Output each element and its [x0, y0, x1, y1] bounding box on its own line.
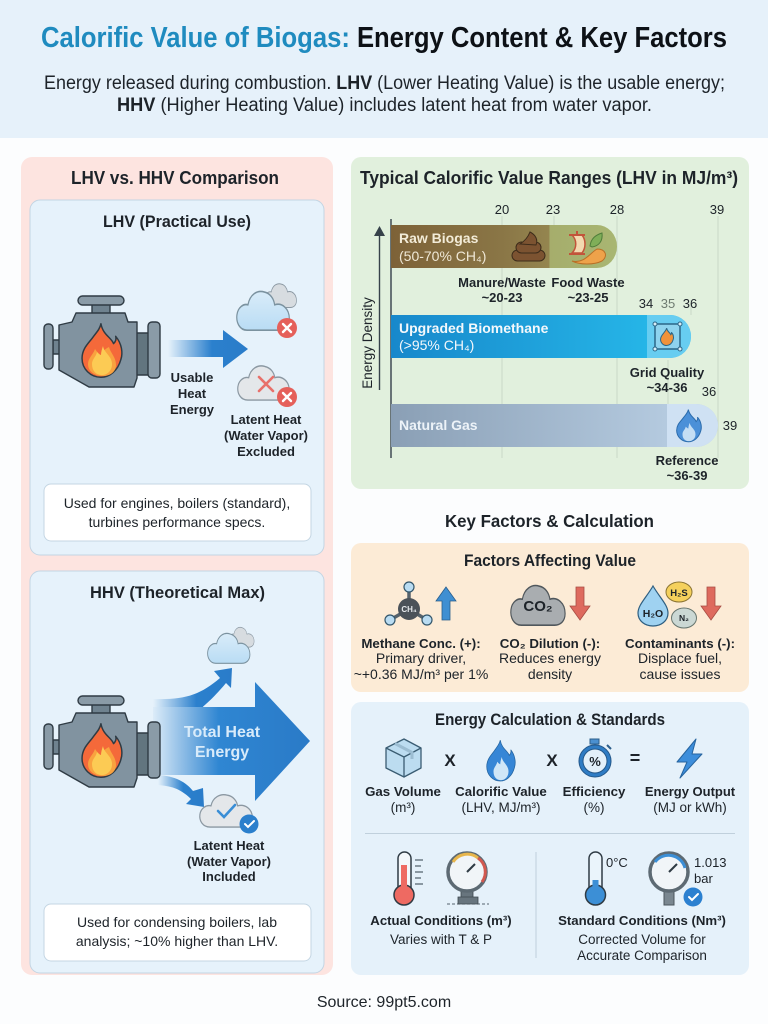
- label: latent heat excluded: Latent Heat: [231, 412, 302, 427]
- scale values: [495, 202, 737, 433]
- heading: calculation: Energy Calculation & Standards: [435, 711, 665, 729]
- bar: raw biogas: (50-70% CH₄): [399, 248, 486, 264]
- icon: top cloud: [208, 627, 254, 663]
- text: methane: Methane Conc. (+):: [361, 636, 481, 651]
- panel: factors affecting value: [351, 543, 749, 692]
- label: usable heat energy: Heat: [178, 386, 207, 401]
- label: latent heat included: Latent Heat: [194, 838, 265, 853]
- chart: range bars: [360, 202, 737, 483]
- formula labels: (MJ or kWh): [653, 800, 727, 815]
- text: contaminants: cause issues: [640, 666, 720, 682]
- icon: gas volume box: [386, 739, 421, 777]
- scale values: 34: [639, 296, 653, 311]
- formula labels: Gas Volume: [365, 784, 441, 799]
- label: standard pressure: bar: [694, 871, 713, 886]
- heading: ranges: Typical Calorific Value Ranges (LHV in MJ/m³): [360, 168, 738, 188]
- icon: efficiency timer: [579, 739, 611, 777]
- note: HHV use: [44, 904, 311, 961]
- bar: raw biogas: [391, 225, 617, 268]
- scale values: 39: [723, 418, 737, 433]
- icon: efficiency timer: %: [589, 754, 601, 769]
- operator: =: [630, 748, 640, 768]
- icon: CO2 cloud with down arrow: [511, 586, 590, 625]
- range labels: Food Waste: [551, 275, 625, 290]
- formula labels: Energy Output: [645, 784, 736, 799]
- icon: actual thermometer: [394, 852, 423, 905]
- text: standard conditions: Standard Conditions (Nm³): [558, 913, 726, 928]
- heading: HHV: HHV (Theoretical Max): [90, 583, 265, 602]
- text: standard conditions: Corrected Volume for: [578, 932, 706, 947]
- icon: contaminants with down arrow: H₂O: [643, 608, 663, 620]
- label: latent heat included: Included: [202, 869, 256, 884]
- icon: food waste: [569, 231, 605, 264]
- text: methane: Primary driver,: [376, 650, 466, 666]
- text: actual conditions: Varies with T & P: [390, 932, 492, 947]
- icon: standard gauge with check: [650, 853, 702, 906]
- icon: contaminants with down arrow: [638, 582, 721, 628]
- bar: upgraded biomethane: Upgraded Biomethane: [399, 320, 549, 336]
- arrow: total heat: [153, 682, 310, 801]
- heading: key factors: Key Factors & Calculation: [445, 511, 654, 531]
- bar: natural gas: Natural Gas: [399, 417, 478, 433]
- heading: factors: Factors Affecting Value: [464, 552, 636, 570]
- icon: CO2 cloud with down arrow: CO₂: [523, 598, 553, 615]
- icon: grid pipe flame: [653, 322, 682, 351]
- operator: X: [444, 751, 456, 770]
- bar: upgraded biomethane: [391, 315, 691, 358]
- label: usable heat energy: Energy: [170, 402, 215, 417]
- text: CO2: Reduces energy: [499, 650, 601, 666]
- axis label: energy density: Energy Density: [360, 297, 375, 389]
- label: standard pressure: 1.013: [694, 855, 727, 870]
- operator: X: [546, 751, 558, 770]
- formula labels: (m³): [391, 800, 415, 815]
- icon: gas flame: [677, 410, 701, 442]
- text: standard conditions: Accurate Comparison: [577, 948, 707, 963]
- label: total heat energy: Total Heat: [184, 724, 261, 741]
- bar: raw biogas: Raw Biogas: [399, 230, 479, 246]
- text: contaminants: Contaminants (-):: [625, 636, 735, 651]
- range labels: ~20-23: [482, 290, 522, 305]
- range labels: ~36-39: [667, 468, 707, 483]
- scale values: 20: [495, 202, 509, 217]
- range labels: ~23-25: [568, 290, 608, 305]
- subtitle: HHV (Higher Heating Value) includes latent heat from water vapor.: [117, 95, 652, 116]
- panel: LHV vs HHV comparison: [21, 157, 333, 975]
- label: latent heat excluded: (Water Vapor): [224, 428, 308, 443]
- text: methane: ~+0.36 MJ/m³ per 1%: [354, 666, 488, 682]
- card: HHV theoretical max: [30, 571, 324, 973]
- panel: typical calorific value ranges: [351, 157, 749, 489]
- title: Calorific Value of Biogas: Energy Content & Key Factors: [41, 22, 727, 54]
- icon: calorific flame: [487, 740, 515, 781]
- label: latent heat included: (Water Vapor): [187, 854, 271, 869]
- arrow: vapor branch up: [153, 668, 232, 707]
- arrow: energy axis: [374, 226, 385, 390]
- bar: upgraded biomethane: (>95% CH₄): [399, 337, 474, 353]
- source: Source: 99pt5.com: [317, 994, 451, 1011]
- arrow: usable heat: [168, 330, 248, 368]
- formula labels: Calorific Value: [455, 784, 547, 799]
- scale values: 23: [546, 202, 560, 217]
- icon: engine with flame: [44, 696, 160, 787]
- subtitle: Energy released during combustion. LHV (Lower Heating Value) is the usable energy;: [44, 73, 725, 94]
- icon: contaminants with down arrow: H₂S: [670, 588, 688, 599]
- range labels: Manure/Waste: [458, 275, 546, 290]
- note: HHV use: analysis; ~10% higher than LHV.: [76, 933, 278, 949]
- note: LHV use: turbines performance specs.: [89, 514, 265, 530]
- range labels: ~34-36: [647, 380, 687, 395]
- icon: excluded latent heat cloud: [238, 366, 297, 407]
- icon: methane molecule with up arrow: [385, 582, 456, 625]
- range labels: Grid Quality: [630, 365, 705, 380]
- label: usable heat energy: Usable: [171, 370, 213, 385]
- arrow: latent branch down: [158, 775, 204, 807]
- formula labels: (%): [584, 800, 604, 815]
- text: contaminants: Displace fuel,: [638, 650, 722, 666]
- icon: methane molecule with up arrow: CH₄: [401, 605, 417, 614]
- note: LHV use: [44, 484, 311, 541]
- heading: LHV: LHV (Practical Use): [103, 212, 251, 231]
- icon: energy bolt: [677, 739, 702, 778]
- icon: actual gauge: [447, 853, 489, 904]
- formula labels: (LHV, MJ/m³): [461, 800, 541, 815]
- formula labels: Efficiency: [563, 784, 626, 799]
- note: HHV use: Used for condensing boilers, lab: [77, 914, 277, 930]
- label: latent heat excluded: Excluded: [237, 444, 295, 459]
- range labels: Reference: [656, 453, 718, 468]
- card: LHV practical use: [30, 200, 324, 555]
- icon: excluded cloud: [237, 284, 297, 338]
- text: CO2: density: [528, 666, 572, 682]
- icon: engine with flame: [44, 296, 160, 387]
- label: total heat energy: Energy: [195, 744, 249, 761]
- text: actual conditions: Actual Conditions (m³): [370, 913, 512, 928]
- icon: standard thermometer: [586, 852, 606, 905]
- heading: comparison: LHV vs. HHV Comparison: [71, 168, 279, 188]
- scale values: 35: [661, 296, 675, 311]
- panel: energy calculation and standards: [351, 702, 749, 975]
- icon: manure: [512, 232, 545, 261]
- header banner: [0, 0, 768, 138]
- icon: included latent heat cloud: [200, 795, 258, 834]
- range labels: [458, 275, 718, 483]
- label: 0 degrees: 0°C: [606, 855, 628, 870]
- scale values: 36: [702, 384, 716, 399]
- text: CO2: CO₂ Dilution (-):: [500, 636, 600, 651]
- note: LHV use: Used for engines, boilers (standard),: [64, 495, 290, 511]
- scale values: 36: [683, 296, 697, 311]
- formula labels: [365, 784, 736, 815]
- scale values: 39: [710, 202, 724, 217]
- bar: natural gas: [391, 404, 718, 447]
- subtitle: [44, 73, 725, 116]
- scale values: 28: [610, 202, 624, 217]
- icon: contaminants with down arrow: N₂: [679, 613, 689, 623]
